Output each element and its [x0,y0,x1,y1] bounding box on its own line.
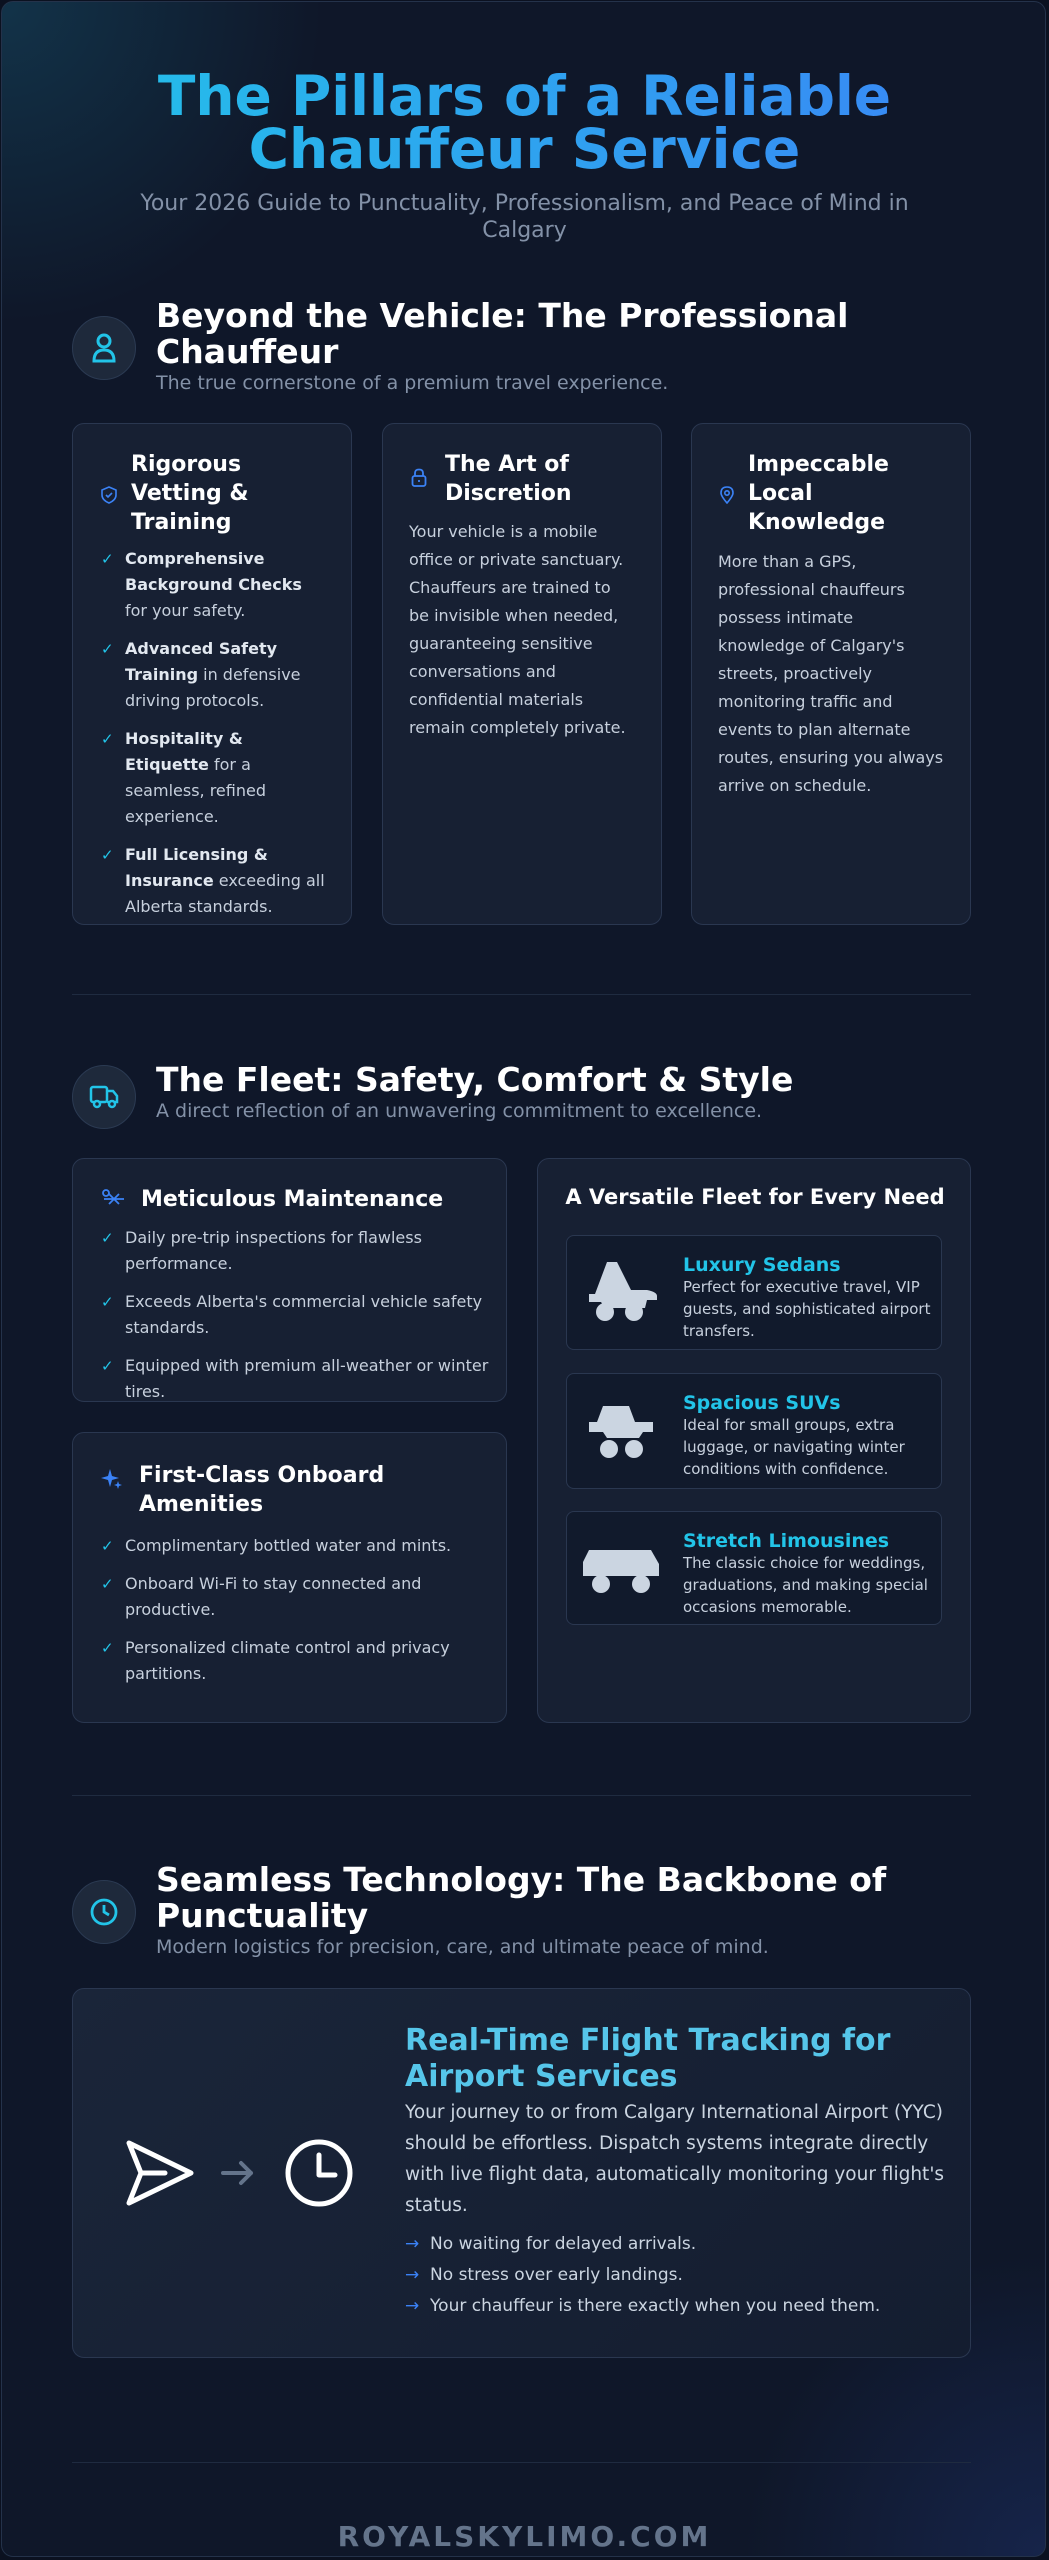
label: Ideal for small groups, extra luggage, or navigating winter conditions with confidence. [683,1416,905,1478]
heading: First-Class Onboard Amenities [139,1463,384,1517]
heading: Meticulous Maintenance [141,1187,443,1212]
checklist: Daily pre-trip inspections for flawless performance. [125,1228,422,1273]
fleet item: limousines [566,1511,942,1625]
checklist [103,1228,488,1401]
checklist: Exceeds Alberta's commercial vehicle safety standards. [125,1292,482,1337]
icon: wrench [102,1189,124,1205]
icon: send arrow clock [126,2140,352,2206]
panel: amenities [72,1432,507,1723]
section 2 heading: The Fleet: Safety, Comfort & Style [156,1060,793,1099]
checklist: Advanced Safety Training in defensive driving protocols. [125,639,301,710]
fleet item: SUVs [566,1373,942,1489]
label: Stretch Limousines [683,1530,889,1552]
text: Your vehicle is a mobile office or private sanctuary. Chauffeurs are trained to be invisible when needed, guaranteeing sensitive conversations and confidential materials remain completely private. [409,522,626,737]
section 2 heading [156,1060,793,1122]
heading: Rigorous Vetting & Training [131,452,249,535]
checklist: Onboard Wi-Fi to stay connected and productive. [125,1574,421,1619]
icon: clock [72,1880,136,1944]
checklist: Comprehensive Background Checks for your safety. [125,549,302,620]
section 1 heading: Beyond the Vehicle: The Professional Chauffeur [156,296,848,371]
text: More than a GPS, professional chauffeurs possess intimate knowledge of Calgary's streets, proactively monitoring traffic and events to plan alternate routes, ensuring you always arrive on schedule. [718,552,943,795]
checklist: Full Licensing & Insurance exceeding all Alberta standards. [125,845,325,916]
section 3 heading: Modern logistics for precision, care, and ultimate peace of mind. [156,1936,769,1958]
checklist: Personalized climate control and privacy partitions. [125,1638,450,1683]
label: Luxury Sedans [683,1254,841,1276]
bullet list: → No waiting for delayed arrivals. [405,2234,696,2254]
bullet list [405,2234,880,2316]
section 1 heading: The true cornerstone of a premium travel experience. [156,372,668,394]
icon: sedan [589,1262,657,1321]
heading: A Versatile Fleet for Every Need [565,1185,945,1209]
section 2 heading: A direct reflection of an unwavering commitment to excellence. [156,1100,762,1122]
title: The Pillars of a Reliable [158,64,891,128]
bullet list: → No stress over early landings. [405,2265,683,2285]
icon: pin [720,486,734,504]
section 3 heading: Seamless Technology: The Backbone of Punctuality [156,1860,886,1935]
label: Spacious SUVs [683,1392,841,1414]
checklist: Complimentary bottled water and mints. [125,1536,451,1555]
title [0,70,1049,176]
icon: truck [72,1065,136,1129]
checklist: Equipped with premium all-weather or winter tires. [125,1356,488,1401]
checklist [103,549,325,916]
bullet list: → Your chauffeur is there exactly when you need them. [405,2296,880,2316]
label: The classic choice for weddings, graduations, and making special occasions memorable. [683,1554,928,1616]
icon: lock [412,468,426,487]
icon: sparkle [101,1469,122,1489]
panel: local knowledge [691,423,971,925]
icon: shield [101,486,117,504]
icon: limo [583,1550,659,1593]
checklist: Hospitality & Etiquette for a seamless, refined experience. [125,729,266,826]
panel: discretion [382,423,662,925]
fleet item: sedans [566,1235,942,1350]
subtitle: Your 2026 Guide to Punctuality, Professionalism, and Peace of Mind in Calgary [140,191,909,243]
panel: flight tracking [72,1988,971,2358]
text: Your journey to or from Calgary International Airport (YYC) should be effortless. Dispatch systems integrate directly with live flight data, automatically monitoring your flight's status. [405,2102,944,2216]
icon: suv [589,1406,653,1458]
heading: Real-Time Flight Tracking for Airport Services [405,2023,890,2094]
icon: person [72,316,136,380]
panel: maintenance [72,1158,507,1402]
panel: versatile fleet [537,1158,971,1723]
footer: ROYALSKYLIMO.COM [338,2520,711,2553]
title: Chauffeur Service [249,117,800,181]
label: Perfect for executive travel, VIP guests, and sophisticated airport transfers. [683,1278,930,1340]
heading: Impeccable Local Knowledge [748,452,889,535]
panel: vetting [72,423,352,925]
heading: The Art of Discretion [445,452,572,506]
checklist [103,1536,451,1683]
